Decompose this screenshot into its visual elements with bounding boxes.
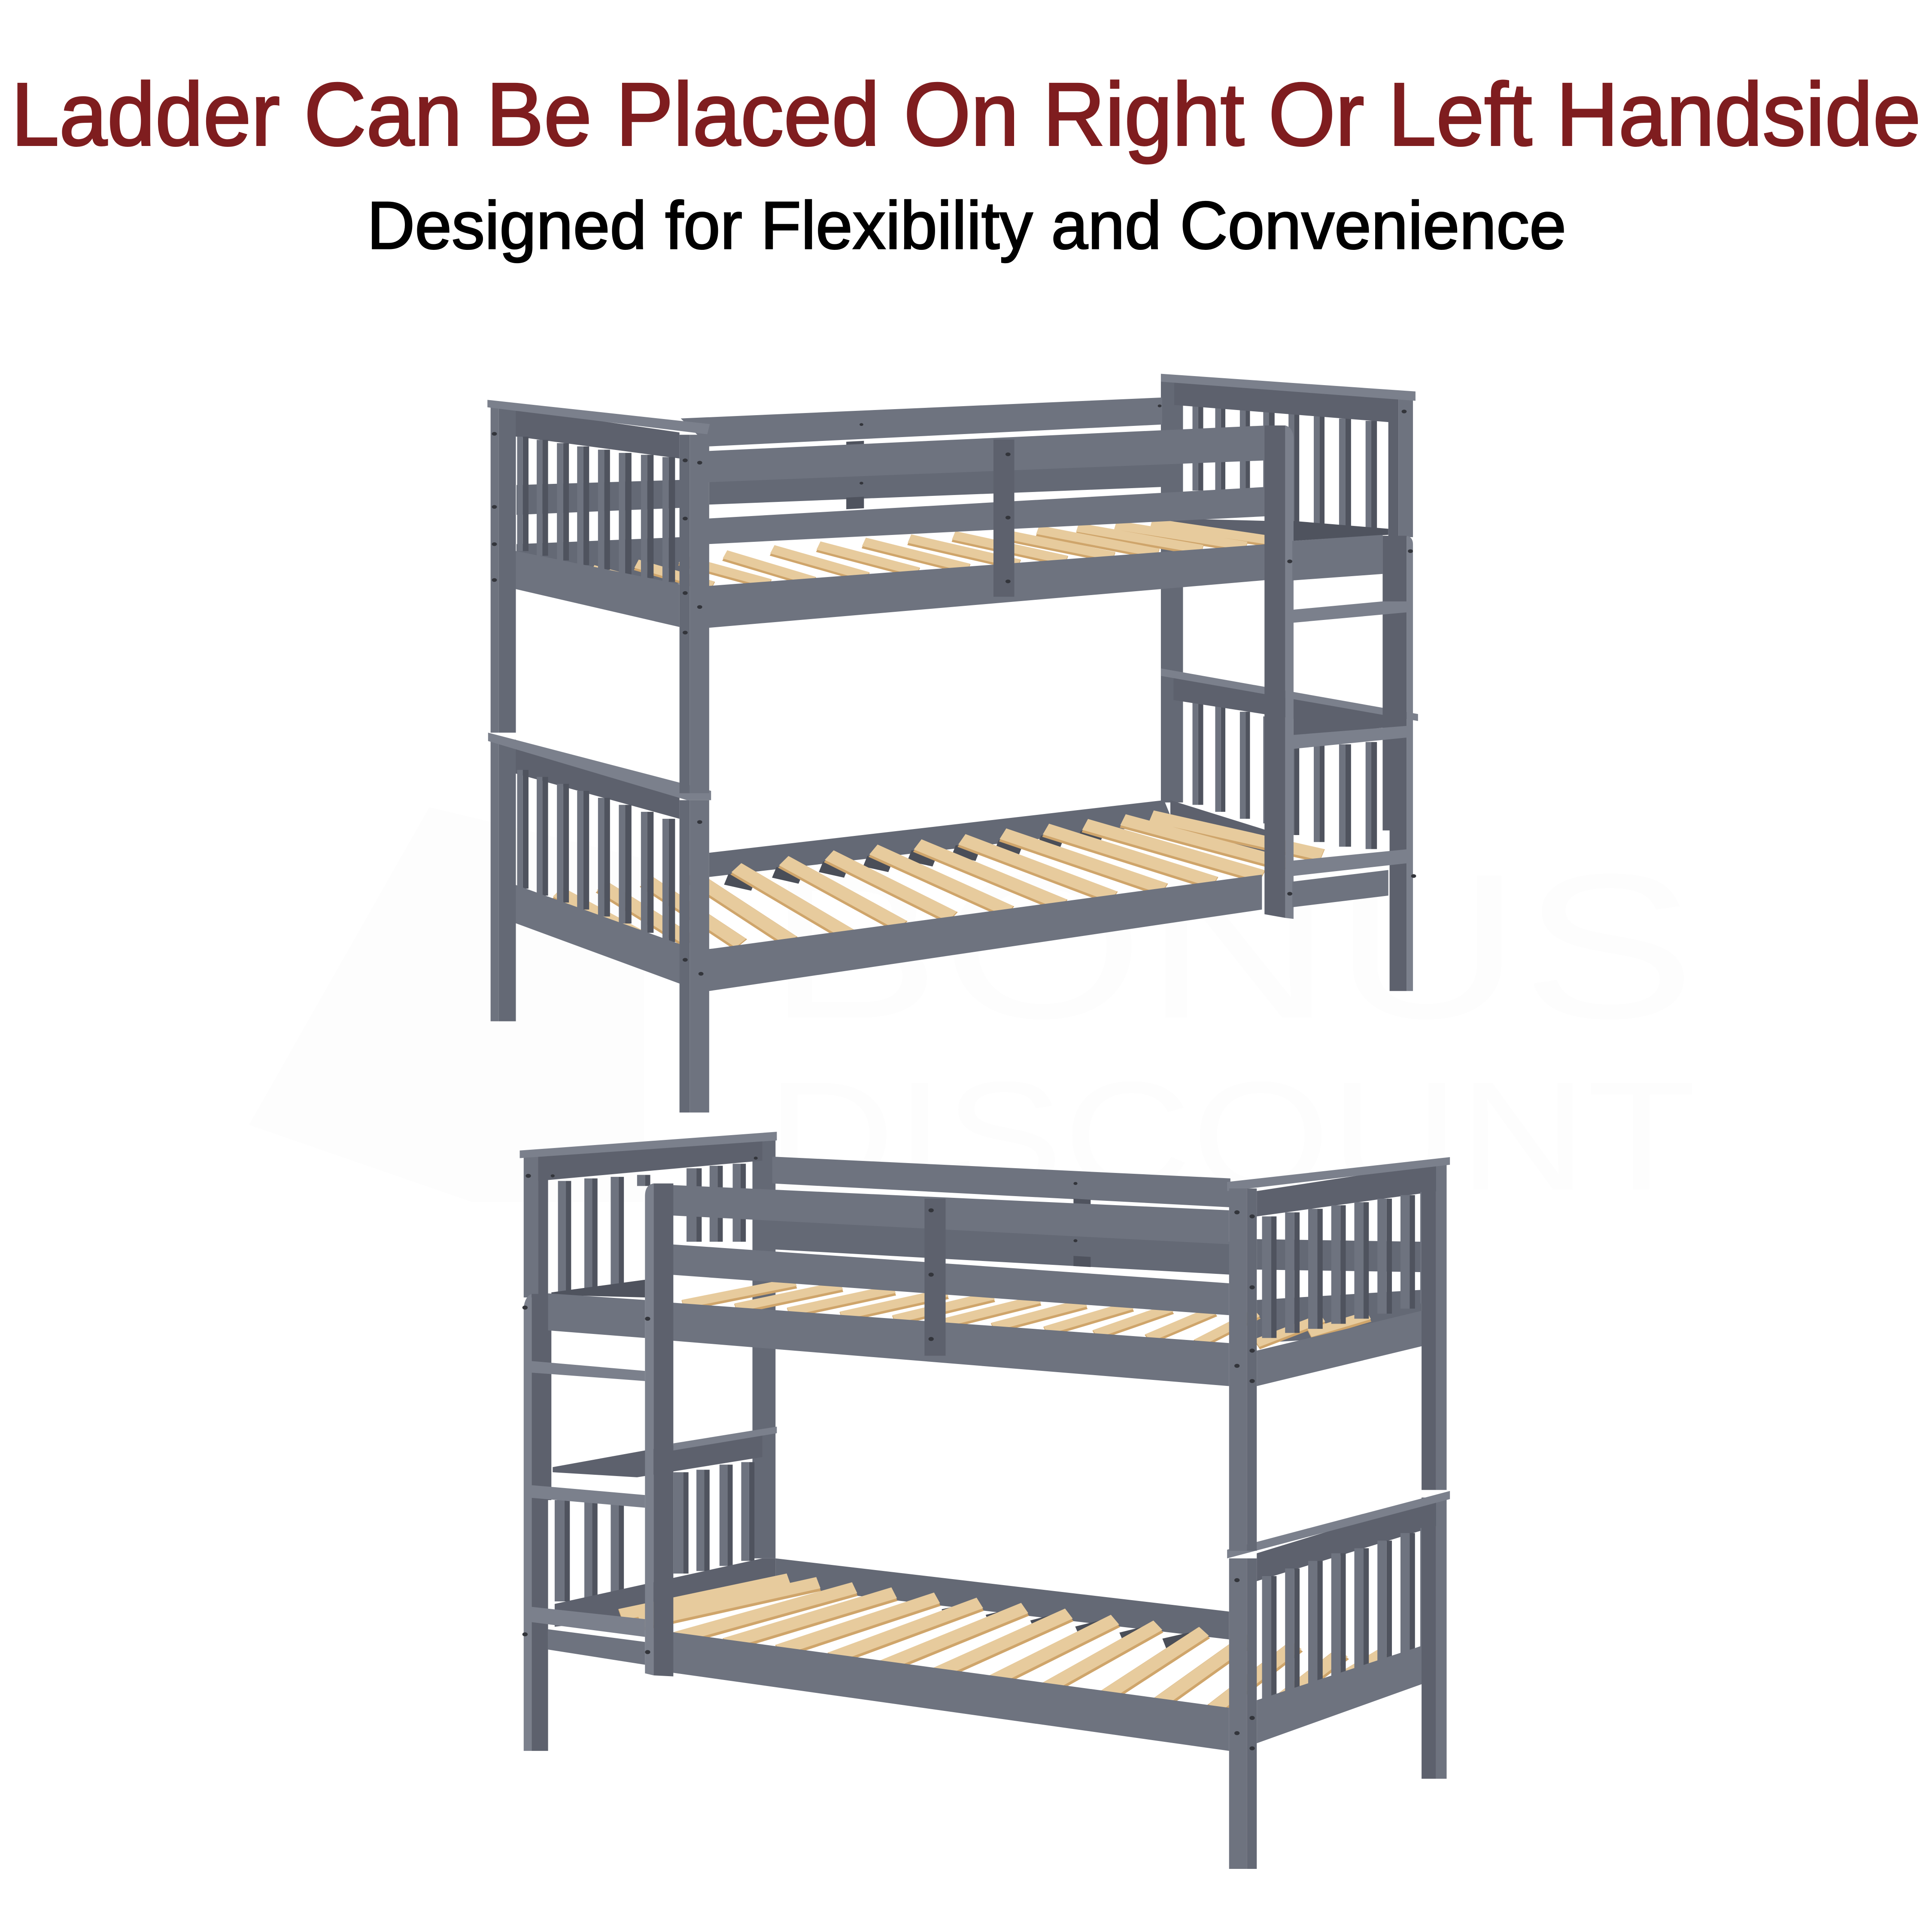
lower front rail join bbox=[707, 949, 712, 991]
far lower headboard bbox=[1161, 668, 1418, 856]
back guard rails bbox=[681, 398, 1164, 509]
upper front rail bbox=[670, 1303, 1229, 1386]
watermark bbox=[249, 807, 1696, 1222]
far upper headboard bbox=[1161, 374, 1416, 547]
title: Ladder Can Be Placed On Right Or Left Handside bbox=[11, 65, 1921, 164]
near post bbox=[680, 435, 709, 1112]
upper slats bbox=[683, 1282, 1369, 1345]
far posts bbox=[1161, 381, 1183, 802]
slat brackets bbox=[726, 836, 1101, 885]
rear bar behind upper headboard bbox=[1257, 1290, 1422, 1343]
subtitle: Designed for Flexibility and Convenience bbox=[367, 188, 1566, 263]
front guard rails bbox=[670, 1185, 1229, 1315]
watermark: BONUS bbox=[766, 831, 1696, 1061]
far lower headboard bbox=[553, 1427, 777, 1627]
lower front rail bbox=[670, 1632, 1229, 1751]
lower back rail bbox=[775, 1558, 1229, 1639]
screws bbox=[522, 1157, 1255, 1750]
back guard rails bbox=[772, 1157, 1230, 1275]
centre support bbox=[924, 1199, 945, 1356]
front guard rails bbox=[707, 425, 1267, 544]
far upper headboard bbox=[520, 1132, 777, 1297]
far posts bbox=[753, 1140, 775, 1558]
ladder bbox=[524, 1183, 673, 1751]
upper slats bbox=[592, 523, 1271, 589]
near upper headboard bbox=[1227, 1157, 1450, 1490]
slat brackets bbox=[901, 1604, 1191, 1644]
screws bbox=[492, 404, 1416, 975]
ladder bbox=[1264, 425, 1413, 991]
upper front rail bbox=[707, 544, 1267, 628]
near upper headboard bbox=[487, 400, 710, 733]
lower back rail bbox=[709, 800, 1173, 877]
near lower headboard bbox=[1227, 1491, 1450, 1779]
bunk bed: ladder on right bbox=[487, 374, 1418, 1112]
watermark: DISCOUNT bbox=[766, 1050, 1696, 1222]
centre support bbox=[993, 439, 1015, 597]
lower slats bbox=[620, 1579, 1385, 1710]
lower front rail bbox=[709, 875, 1262, 991]
near lower headboard bbox=[488, 733, 711, 1021]
bunk bed: ladder on left bbox=[520, 1132, 1450, 1869]
lower slats bbox=[558, 816, 1322, 945]
rear bar behind upper headboard bbox=[516, 537, 681, 584]
near post bbox=[1229, 1188, 1257, 1869]
